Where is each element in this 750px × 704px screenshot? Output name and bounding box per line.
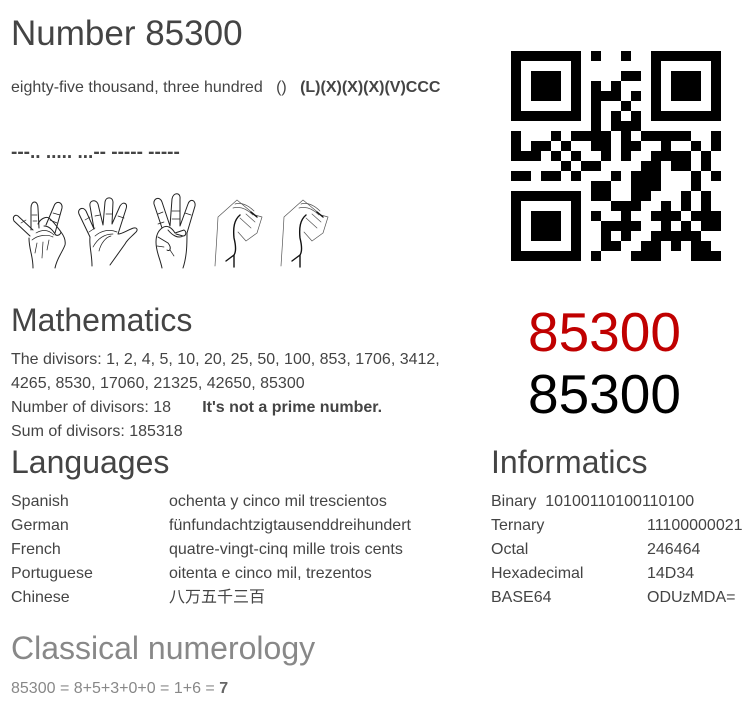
- hand sign 3: [154, 194, 195, 268]
- translations: ochenta y cinco mil trescientos fünfundachtzigtausenddreihundert quatre-vingt-cinq mille trois cents oitenta e cinco mil, trezentos 八万五千三百: [169, 493, 411, 606]
- informatics values: 11100000021 246464 14D34 ODUzMDA=: [647, 517, 743, 606]
- large red number: 85300: [528, 301, 681, 363]
- numerology formula: 85300 = 8+5+3+0+0 = 1+6 = 7: [11, 680, 228, 697]
- heading: informatics: Informatics: [491, 444, 647, 480]
- language names: Spanish German French Portuguese Chinese: [11, 493, 93, 606]
- large black number: 85300: [528, 363, 681, 425]
- hand sign 0: [281, 200, 328, 267]
- number in words and roman numeral: eighty-five thousand, three hundred () (L)(X)(X)(X)(V)CCC: [11, 79, 440, 96]
- divisors text: The divisors: 1, 2, 4, 5, 10, 20, 25, 50, 100, 853, 1706, 3412, 4265, 8530, 17060, 21325, 42650, 85300 Number of divisors: 18 It's not a prime number. Sum of divisors: 185318: [11, 351, 440, 440]
- heading: languages: Languages: [11, 444, 169, 480]
- title: Number 85300: [11, 14, 243, 53]
- hand sign 8: [13, 202, 65, 268]
- heading: classical numerology: Classical numerology: [11, 630, 315, 666]
- QR code: [511, 51, 721, 261]
- hand sign 5: [79, 198, 137, 266]
- sign language hands: [12, 193, 328, 268]
- informatics labels: Binary 10100110100110100 Ternary Octal Hexadecimal BASE64: [491, 493, 694, 606]
- morse code: ---.. ..... ...-- ----- -----: [11, 142, 180, 163]
- hand sign 0: [215, 200, 262, 267]
- heading: mathematics: Mathematics: [11, 302, 192, 338]
